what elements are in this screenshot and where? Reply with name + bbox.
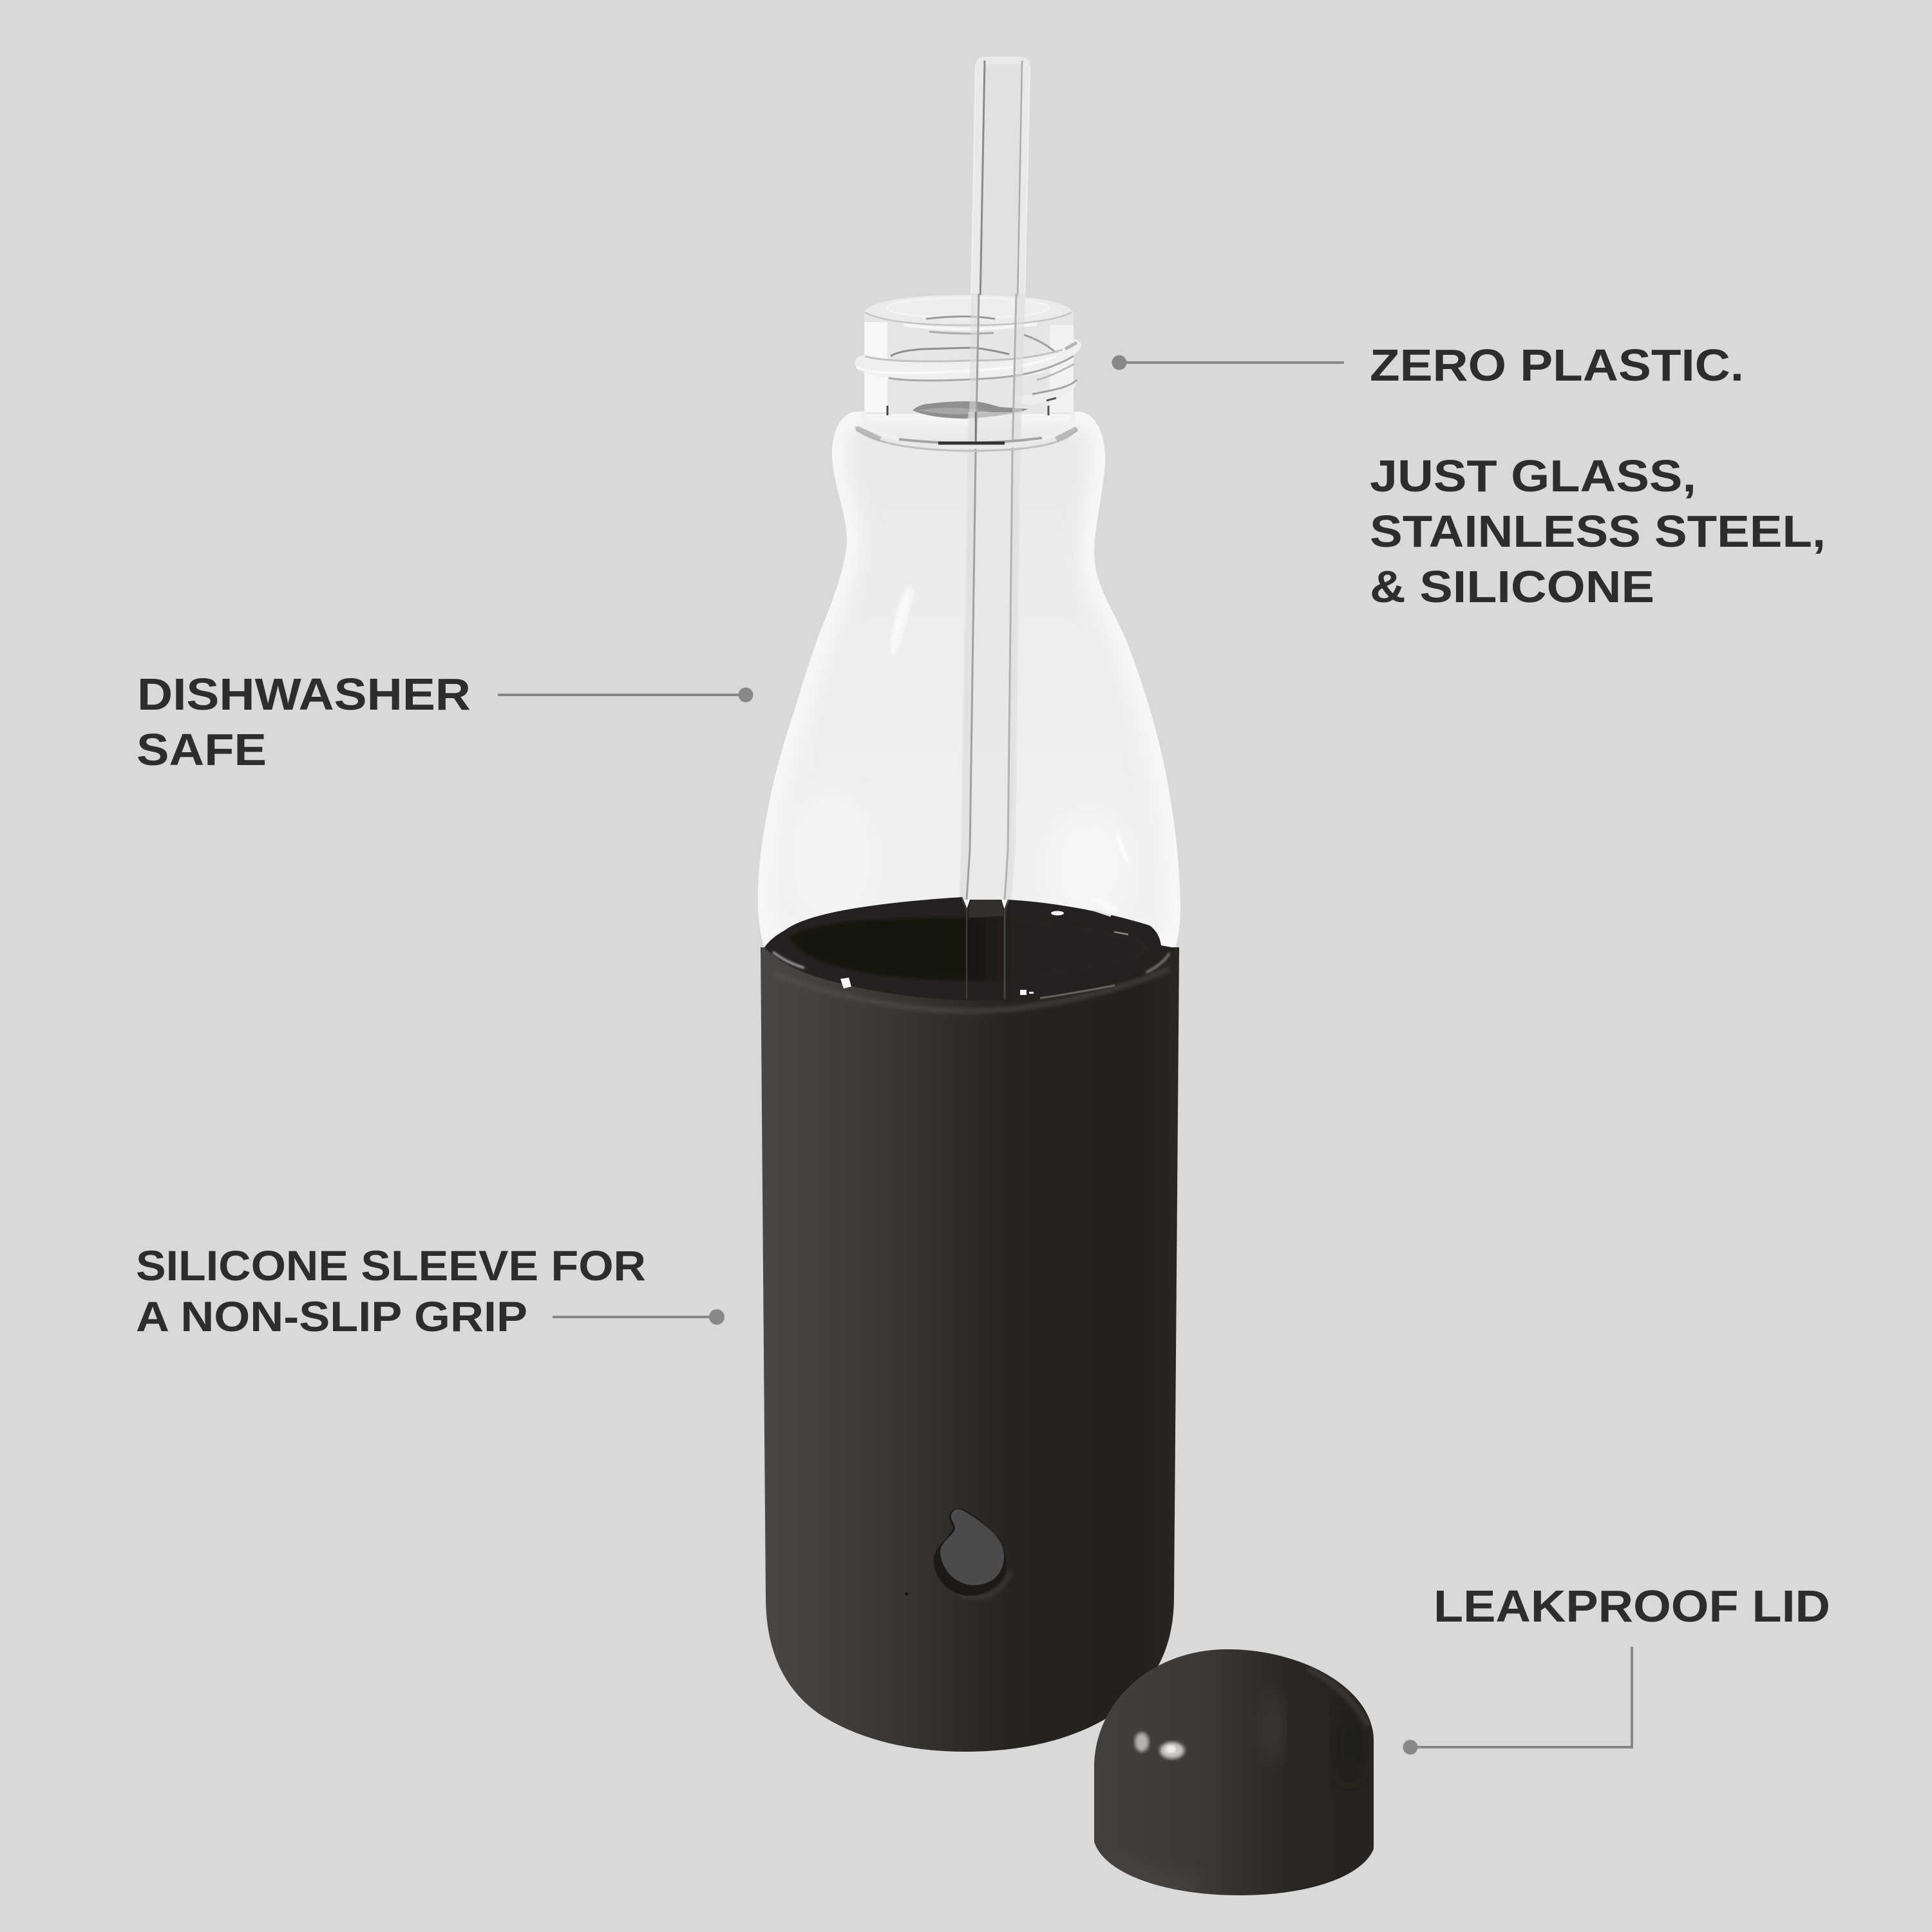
label: zero plastic: STAINLESS STEEL, (1370, 506, 1826, 556)
collar ring (853, 412, 1077, 451)
silicone sleeve (761, 947, 1179, 1752)
neck lip (865, 295, 1072, 353)
label: dishwasher safe (137, 669, 471, 775)
neck oval base (913, 401, 1028, 419)
label: dishwasher safe: DISHWASHER (137, 669, 471, 719)
label: zero plastic (1370, 340, 1826, 612)
bottle (758, 57, 1180, 1752)
sleeve thumb hole (934, 1509, 1011, 1598)
leader: silicone sleeve (553, 1309, 724, 1325)
straw lower (960, 294, 1025, 900)
straw upper (971, 57, 1030, 303)
label: leakproof lid: LEAKPROOF LID (1434, 1581, 1830, 1631)
label: silicone sleeve: SILICONE SLEEVE FOR (136, 1242, 646, 1289)
label: zero plastic: & SILICONE (1370, 562, 1654, 612)
glass base in sleeve (764, 897, 1175, 1001)
glass neck (855, 295, 1081, 419)
neck thread (855, 339, 1081, 381)
lid (1094, 1649, 1374, 1895)
label: zero plastic: JUST GLASS, (1370, 451, 1696, 501)
leader: zero plastic (1112, 355, 1344, 370)
glass base highlights (840, 910, 1128, 995)
label: dishwasher safe: SAFE (137, 724, 267, 775)
label: silicone sleeve (136, 1242, 646, 1340)
leader: dishwasher safe (498, 688, 753, 702)
neck thread lower (1013, 380, 1077, 404)
glass body (758, 412, 1180, 947)
label: zero plastic: ZERO PLASTIC. (1370, 340, 1744, 390)
label: silicone sleeve: A NON-SLIP GRIP (136, 1293, 527, 1340)
leader: leakproof lid (1403, 1647, 1632, 1754)
